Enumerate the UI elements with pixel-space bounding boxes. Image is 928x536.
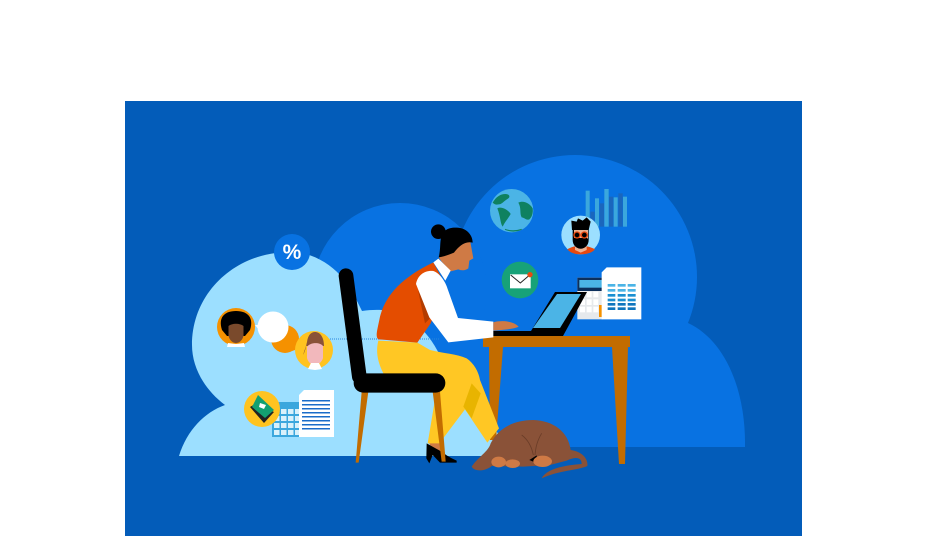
icon: calendar and document [272,390,334,437]
laptop [491,292,587,336]
icon: spreadsheet document [602,267,641,319]
vest [377,262,445,343]
hair [439,228,473,257]
dotted connector [330,338,440,340]
icon: money badge [244,391,280,427]
shirt arm [416,271,493,342]
trousers [377,341,499,443]
shoe [426,443,457,463]
woman figure [377,224,519,463]
chair legs [356,392,446,463]
trouser shadow [463,383,481,418]
ankle [428,442,445,453]
top right icons [490,189,641,319]
panel: blue background [125,101,802,536]
icon: percent badge [274,234,310,270]
icon: avatar with afro [217,308,255,347]
icon: avatar woman [295,331,333,370]
chair [346,276,446,463]
chart: bars [586,189,627,227]
icon: speech bubbles [255,312,301,353]
arm shadow [418,290,432,323]
icon: globe [490,189,533,232]
hair bun [431,224,446,239]
hand [493,321,519,331]
icon: email badge [502,262,538,298]
chair back [346,276,359,377]
icon: percent badge: % [283,241,302,264]
light cloud [179,252,512,456]
collar [433,259,451,281]
chair seat [363,354,436,412]
dark cloud [313,155,745,447]
icon: calculator [577,278,603,319]
desk [483,336,630,464]
icon: avatar man with beard [561,216,600,254]
neck and face [439,240,473,271]
dog [472,420,587,478]
